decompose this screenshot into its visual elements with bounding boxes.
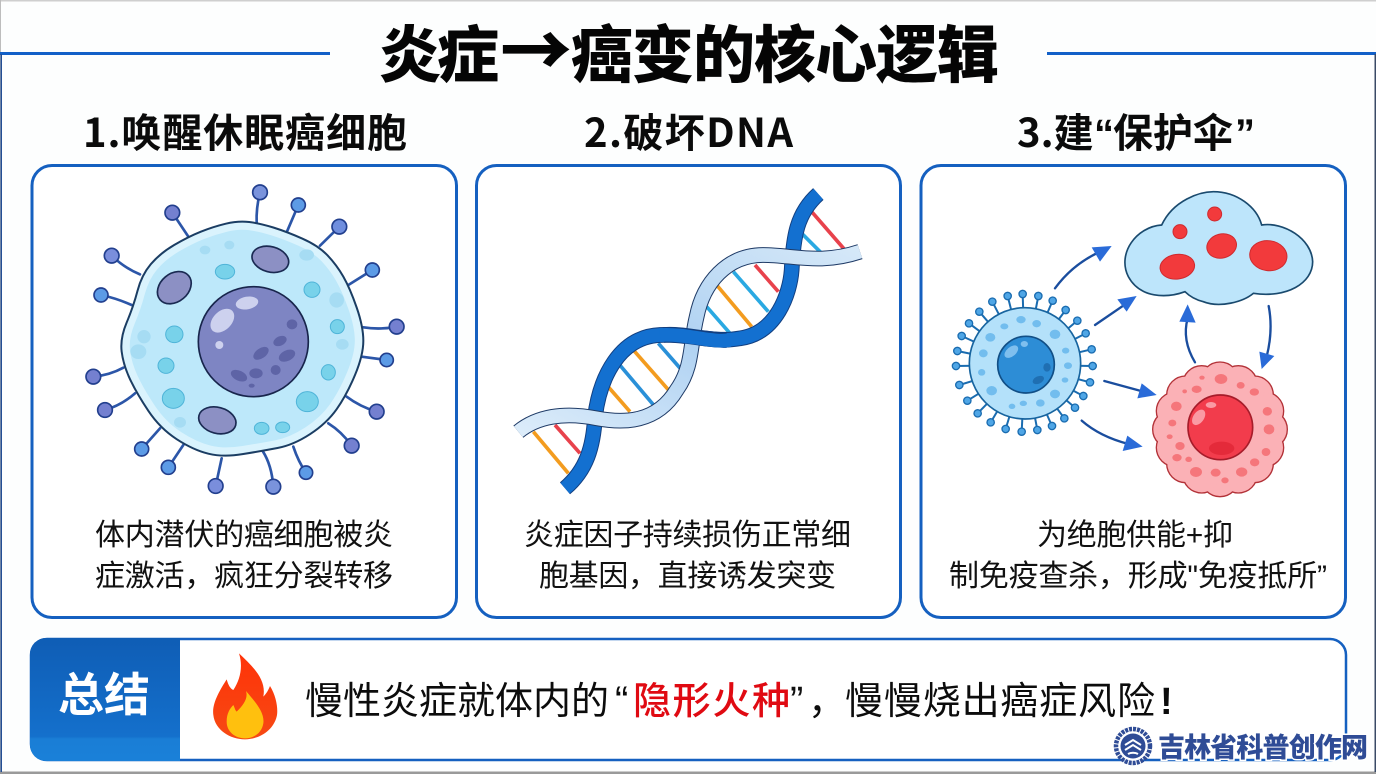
arrow: tumor cell up to cloud bbox=[1179, 304, 1196, 362]
heading: step 2: 2.破坏DNA bbox=[584, 101, 793, 159]
arrow: immune cell to cloud bbox=[1055, 246, 1112, 288]
caption: step 1: 体内潜伏的癌细胞被炎 bbox=[95, 519, 393, 552]
caption: step 3: 为绝胞供能+抑 bbox=[1037, 519, 1233, 552]
heading: step 3: “ bbox=[1094, 112, 1114, 156]
icon: red tumor cell bbox=[1153, 363, 1287, 496]
icon: watermark seal bbox=[1116, 729, 1150, 763]
panel: build protective umbrella bbox=[921, 166, 1346, 618]
panel: summary bar bbox=[30, 638, 1346, 761]
caption: step 2: 胞基因，直接诱发突变 bbox=[539, 560, 836, 593]
arrow: immune cell to tumor cell, lower bbox=[1082, 421, 1143, 451]
summary statement: ” bbox=[790, 679, 803, 723]
icon: cancer cell bbox=[86, 185, 404, 494]
summary statement: 慢性炎症就体内的 bbox=[305, 681, 609, 723]
summary statement: 慢慢烧出癌症风险 bbox=[845, 681, 1155, 723]
heading: step 3: 3.建 bbox=[1017, 101, 1094, 159]
diagram: immune shelter cycle bbox=[952, 192, 1313, 496]
watermark: 吉林省科普创作网 bbox=[1158, 733, 1368, 763]
icon: blue cloud with tumor cells bbox=[1125, 192, 1313, 304]
summary statement: ， bbox=[808, 681, 846, 723]
summary statement: 隐形火种 bbox=[633, 681, 790, 723]
icon: flame bbox=[213, 653, 277, 739]
arrow: cloud down to tumor cell bbox=[1259, 306, 1274, 369]
label: summary tab bbox=[30, 638, 180, 761]
title: 癌变的核心逻辑 bbox=[571, 5, 999, 95]
caption: step 1 bbox=[95, 519, 393, 593]
heading: step 1: 1.唤醒休眠癌细胞 bbox=[83, 101, 407, 159]
arrow: immune cell to cloud, lower bbox=[1095, 296, 1137, 325]
icon: blue immune cell bbox=[952, 290, 1096, 435]
caption: step 2: 炎症因子持续损伤正常细 bbox=[524, 519, 851, 552]
panel: wake dormant cancer cells bbox=[32, 166, 456, 618]
arrow: immune cell to tumor cell bbox=[1104, 381, 1157, 398]
panel: damage DNA bbox=[476, 166, 900, 618]
caption: step 3: 制免疫查杀，形成"免疫抵所” bbox=[949, 560, 1327, 593]
caption: step 1: 症激活，疯狂分裂转移 bbox=[95, 560, 393, 593]
label: summary tab: 总结 bbox=[58, 669, 150, 721]
caption: step 3 bbox=[949, 519, 1327, 593]
icon: DNA double helix bbox=[518, 194, 860, 488]
caption: step 2 bbox=[524, 519, 851, 593]
summary statement: ! bbox=[1160, 681, 1173, 723]
heading: step 3: ” bbox=[1235, 112, 1255, 156]
summary statement: “ bbox=[615, 679, 628, 723]
title: 炎症 bbox=[379, 5, 499, 95]
heading: step 3: 保护伞 bbox=[1113, 101, 1233, 159]
